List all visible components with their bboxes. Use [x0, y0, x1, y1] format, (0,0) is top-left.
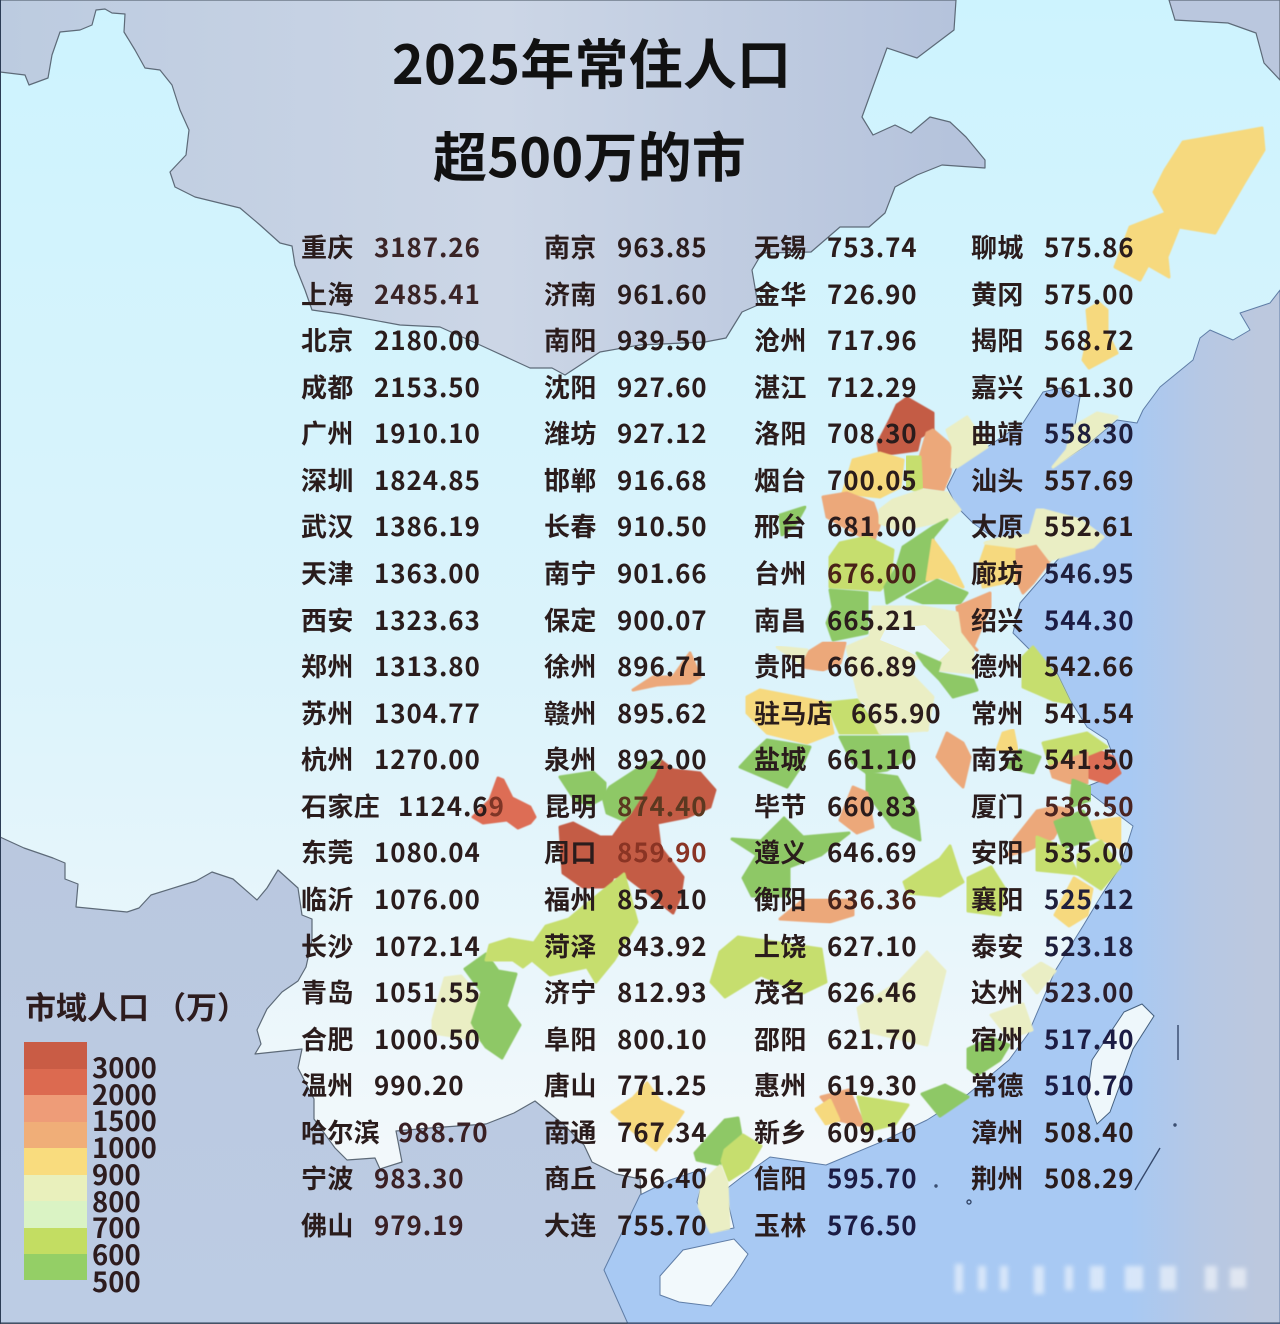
region: Huizhou	[858, 1097, 908, 1131]
list column 2: 961.60	[617, 275, 708, 312]
region: Hangzhou	[1009, 807, 1070, 855]
region: Ningbo neighbour	[1055, 811, 1097, 848]
list column 1: 东莞	[301, 833, 354, 870]
region: small green	[780, 507, 805, 535]
list column 3: 676.00	[827, 554, 918, 591]
list column 1: 983.30	[374, 1159, 465, 1196]
list column 2: 周口	[544, 833, 597, 870]
map: Russian far east	[1169, 0, 1280, 80]
list column 1: 1076.00	[374, 880, 481, 917]
list column 3: 660.83	[827, 787, 918, 824]
list column 4: 襄阳	[971, 880, 1024, 917]
list column 2: 910.50	[617, 507, 708, 544]
region: Chengdu	[473, 778, 535, 828]
list column 1: 1124.6	[398, 787, 489, 824]
list column 3: 681.00	[827, 507, 918, 544]
list column 3: 无锡	[754, 228, 807, 265]
list column 4: 常州	[971, 694, 1024, 731]
list column 3: 遵义	[754, 833, 807, 870]
list column 1: 1270.00	[374, 740, 481, 777]
list column 3: 726.90	[827, 275, 918, 312]
list column 4: 542.66	[1044, 647, 1135, 684]
legend scale labels	[92, 1046, 157, 1300]
list column 1: 2180.00	[374, 321, 481, 358]
list column 3: 毕节	[754, 787, 807, 824]
list column 1: 2153.50	[374, 368, 481, 405]
region: Yunnan green	[465, 954, 520, 1058]
list column 2: 阜阳	[544, 1020, 597, 1057]
list column 2: 939.50	[617, 321, 708, 358]
map: city regions shaded by population	[433, 128, 1264, 1232]
legend scale labels: 800	[92, 1180, 141, 1220]
list column 1: 1363.00	[374, 554, 481, 591]
list column 1: 成都	[301, 368, 354, 405]
region: Henan plain	[847, 607, 973, 730]
region: Hubei north	[840, 737, 910, 773]
list column 2: 859.90	[617, 833, 708, 870]
region: Quanzhou	[991, 1004, 1032, 1038]
list column 1: 上海	[301, 275, 354, 312]
list column 1: 宁波	[301, 1159, 354, 1196]
list column 4: 嘉兴	[971, 368, 1024, 405]
region: southern Shanxi	[830, 537, 893, 590]
region: Shandong north	[985, 510, 1103, 560]
map: seas	[604, 290, 1280, 1324]
list column 1: 990.20	[374, 1066, 465, 1103]
region: Nanning	[612, 1083, 683, 1150]
region: Zhoukou lake hole	[880, 625, 950, 665]
legend scale labels: 3000	[92, 1046, 157, 1086]
list column 4: 廊坊	[971, 554, 1024, 591]
list column 3: 708.30	[827, 414, 918, 451]
list column 2: 昆明	[544, 787, 597, 824]
legend scale labels: 600	[92, 1233, 141, 1273]
list column 4: 揭阳	[971, 321, 1024, 358]
list column 1: 佛山	[301, 1206, 354, 1243]
list column 4: 508.40	[1044, 1113, 1135, 1150]
region: Ningbo	[1092, 818, 1120, 848]
list column 2: 赣州	[544, 694, 597, 731]
region: Shijiazhuang	[823, 493, 880, 543]
region: Wenzhou	[1055, 878, 1092, 926]
region: Linyi	[957, 593, 990, 650]
legend colour ramp	[24, 1042, 87, 1280]
list column 3	[754, 228, 942, 1243]
list column 3: 台州	[754, 554, 807, 591]
region: Henan south	[827, 700, 880, 733]
list column 3: 驻马店	[754, 694, 833, 731]
list column 1	[301, 228, 505, 1243]
legend scale labels: 700	[92, 1206, 141, 1246]
region: Jinhua	[1037, 837, 1078, 874]
list column 3: 信阳	[754, 1159, 807, 1196]
list column 2: 邯郸	[544, 461, 597, 498]
list column 4: 聊城	[971, 228, 1024, 265]
region: Tangshan	[947, 417, 987, 467]
list column 1: 武汉	[301, 507, 354, 544]
list column 4: 黄冈	[971, 275, 1024, 312]
list column 4: 泰安	[971, 927, 1024, 964]
list column 1: 2485.41	[374, 275, 481, 312]
list column 4: 541.54	[1044, 694, 1135, 731]
list column 1: 杭州	[301, 740, 354, 777]
region: Dalian	[1053, 413, 1117, 467]
title: 2025年常住人口	[392, 21, 791, 100]
legend title: 市域人口（万）	[25, 983, 248, 1028]
list column 4: 546.95	[1044, 554, 1135, 591]
list column 4: 宿州	[971, 1020, 1024, 1057]
list column 3: 湛江	[754, 368, 807, 405]
list column 3: 700.05	[827, 461, 918, 498]
list column 3: 茂名	[754, 973, 807, 1010]
region: Changchun	[1083, 303, 1117, 368]
region: Xuzhou east	[917, 653, 977, 697]
region: Beijing	[878, 398, 933, 455]
title: 超500万的市	[433, 114, 746, 193]
list column 1: 青岛	[301, 973, 354, 1010]
list column 2: 济宁	[544, 973, 597, 1010]
list column 1: 天津	[301, 554, 354, 591]
region: Henan west	[827, 590, 867, 640]
list column 1: 苏州	[301, 694, 354, 731]
list column 2: 徐州	[544, 647, 597, 684]
list column 3: 753.74	[827, 228, 918, 265]
list column 4: 541.50	[1044, 740, 1135, 777]
region: Guizhou lime	[486, 874, 637, 982]
region: Shantou	[922, 1085, 968, 1116]
region: Shangrao	[968, 867, 1005, 915]
list column 1: 长沙	[301, 927, 354, 964]
list column 1: 988.70	[398, 1113, 489, 1150]
list column 3: 金华	[754, 275, 807, 312]
region: Maoming	[722, 1135, 761, 1180]
list column 1: 临沂	[301, 880, 354, 917]
list column 1: 广州	[301, 414, 354, 451]
list column 1: 北京	[301, 321, 354, 358]
list column 3: 665.90	[851, 694, 942, 731]
list column 3: 717.96	[827, 321, 918, 358]
list column 3: 661.10	[827, 740, 918, 777]
list column 4: 536.50	[1044, 787, 1135, 824]
list column 2: 892.00	[617, 740, 708, 777]
region: Shanghai	[1087, 747, 1120, 783]
list column 4: 曲靖	[971, 414, 1024, 451]
region: Zhanjiang	[699, 1166, 729, 1232]
region: Anhui east	[1007, 750, 1040, 773]
list column 1: 1386.19	[374, 507, 481, 544]
list column 2: 商丘	[544, 1159, 597, 1196]
list column 4	[971, 228, 1135, 1196]
list column 2: 南通	[544, 1113, 597, 1150]
list column 4: 575.86	[1044, 228, 1135, 265]
list column 3: 贵阳	[754, 647, 807, 684]
list column 4: 552.61	[1044, 507, 1135, 544]
list column 4: 523.00	[1044, 973, 1135, 1010]
list column 2: 南宁	[544, 554, 597, 591]
legend scale labels: 900	[92, 1153, 141, 1193]
list column 1: 1313.80	[374, 647, 481, 684]
list column 1: 石家庄	[301, 787, 380, 824]
list column 1: 1072.14	[374, 927, 481, 964]
legend scale labels: 1500	[92, 1099, 157, 1139]
list column 3: 上饶	[754, 927, 807, 964]
list column 4: 德州	[971, 647, 1024, 684]
region: Sichuan green west	[560, 772, 605, 805]
region: Anhui	[937, 733, 970, 787]
list column 4: 绍兴	[971, 601, 1024, 638]
region: Huzhou	[1070, 780, 1090, 807]
list column 3: 沧州	[754, 321, 807, 358]
list column 1: 1304.77	[374, 694, 481, 731]
region: Heze	[927, 540, 963, 587]
list column 1: 1824.85	[374, 461, 481, 498]
region: Shandong centre	[980, 543, 1017, 587]
region: Tianjin	[920, 430, 953, 490]
region: Chongqing	[560, 760, 715, 913]
list column 3: 南昌	[754, 601, 807, 638]
list column 4: 557.69	[1044, 461, 1135, 498]
list column 4: 525.12	[1044, 880, 1135, 917]
region: Hangzhou north	[1050, 753, 1087, 783]
region: pale south	[857, 687, 927, 733]
list column 3: 新乡	[754, 1113, 807, 1150]
list column 4: 535.00	[1044, 833, 1135, 870]
list column 4: 544.30	[1044, 601, 1135, 638]
region: Xianyang strip	[633, 653, 700, 690]
list column 3: 712.29	[827, 368, 918, 405]
list column 2: 756.40	[617, 1159, 708, 1196]
list column 3: 595.70	[827, 1159, 918, 1196]
region: Xingtai border	[907, 457, 922, 493]
list column 3: 609.10	[827, 1113, 918, 1150]
list column 3: 惠州	[754, 1066, 807, 1103]
list column 4: 523.18	[1044, 927, 1135, 964]
list column 2: 泉州	[544, 740, 597, 777]
region: Weifang	[1017, 543, 1050, 593]
list column 3: 621.70	[827, 1020, 918, 1057]
list column 1: 3187.26	[374, 228, 481, 265]
legend scale labels: 2000	[92, 1073, 157, 1113]
list column 1: 1051.55	[374, 973, 481, 1010]
list column 3: 626.46	[827, 973, 918, 1010]
list column 2: 927.12	[617, 414, 708, 451]
list column 1: 重庆	[301, 228, 354, 265]
region: Cangzhou	[880, 490, 960, 530]
list column 3: 619.30	[827, 1066, 918, 1103]
region: Foshan	[816, 1100, 839, 1124]
region: Nanchang	[904, 846, 963, 896]
map: southwestern neighbours	[0, 837, 650, 1324]
list column 2: 800.10	[617, 1020, 708, 1057]
list column 4: 漳州	[971, 1113, 1024, 1150]
map: northern neighbours	[0, 0, 985, 375]
list column 2: 927.60	[617, 368, 708, 405]
region: Suzhou	[1043, 733, 1107, 765]
list column 2: 916.68	[617, 461, 708, 498]
list column 2: 963.85	[617, 228, 708, 265]
list column 4: 568.72	[1044, 321, 1135, 358]
legend scale labels: 1000	[92, 1126, 157, 1166]
list column 2: 济南	[544, 275, 597, 312]
map: Hainan island	[660, 1239, 748, 1306]
list column 4: 汕头	[971, 461, 1024, 498]
list column 2: 755.70	[617, 1206, 708, 1243]
region: small yellow	[997, 730, 1017, 750]
list column 4: 荆州	[971, 1159, 1024, 1196]
list column 3: 627.10	[827, 927, 918, 964]
list column 1: 1000.50	[374, 1020, 481, 1057]
list column 2	[544, 228, 708, 1243]
list column 1: 1323.63	[374, 601, 481, 638]
list column 3: 玉林	[754, 1206, 807, 1243]
list column 2: 895.62	[617, 694, 708, 731]
list column 2: 南阳	[544, 321, 597, 358]
list column 3: 衡阳	[754, 880, 807, 917]
legend	[24, 983, 248, 1300]
region: Wuhan	[840, 787, 873, 833]
list column 2: 长春	[544, 507, 597, 544]
list column 4: 太原	[971, 507, 1024, 544]
list column 2: 唐山	[544, 1066, 597, 1103]
list column 4: 517.40	[1044, 1020, 1135, 1057]
list column 3: 636.36	[827, 880, 918, 917]
region: Zhangzhou	[968, 1038, 1009, 1075]
list column 3: 盐城	[754, 740, 807, 777]
list column 1: 温州	[301, 1066, 354, 1103]
list column 2: 812.93	[617, 973, 708, 1010]
list column 1: 1080.04	[374, 833, 481, 870]
list column 3: 烟台	[754, 461, 807, 498]
list column 3: 邢台	[754, 507, 807, 544]
list column 2: 沈阳	[544, 368, 597, 405]
list column 4: 508.29	[1044, 1159, 1135, 1196]
list column 2: 767.34	[617, 1113, 708, 1150]
region: Shaoyang	[711, 937, 826, 997]
list column 1: 西安	[301, 601, 354, 638]
region: Fuzhou	[1023, 963, 1055, 993]
list column 1: 合肥	[301, 1020, 354, 1057]
list column 2: 896.71	[617, 647, 708, 684]
list column 2: 843.92	[617, 927, 708, 964]
list column 2: 874.40	[617, 787, 708, 824]
region: Hengyang strip	[780, 900, 853, 922]
region: Harbin	[1115, 128, 1264, 280]
map: small islands and boundary dashes	[935, 1025, 1178, 1204]
map: Taiwan island	[1087, 1004, 1154, 1124]
list column 3: 洛阳	[754, 414, 807, 451]
list column 4: 厦门	[971, 787, 1024, 824]
region: Handan strip	[885, 520, 947, 603]
list column 2: 菏泽	[544, 927, 597, 964]
region: Ganzhou	[858, 952, 945, 1045]
list column 2: 771.25	[617, 1066, 708, 1103]
list column 3: 646.69	[827, 833, 918, 870]
list column 1: 1910.10	[374, 414, 481, 451]
list column 2: 福州	[544, 880, 597, 917]
list column 1: 979.19	[374, 1206, 465, 1243]
region: Taizhou	[1078, 841, 1120, 889]
list column 3: 576.50	[827, 1206, 918, 1243]
list column 1: 哈尔滨	[301, 1113, 380, 1150]
list column 2: 南京	[544, 228, 597, 265]
region: Guiyang area	[803, 643, 845, 670]
list column 4: 561.30	[1044, 368, 1135, 405]
region: Baoding	[843, 453, 903, 497]
list column 2: 大连	[544, 1206, 597, 1243]
list column 2: 保定	[544, 601, 597, 638]
list column 4: 575.00	[1044, 275, 1135, 312]
region: Zunyi	[732, 818, 849, 896]
list column 4: 达州	[971, 973, 1024, 1010]
list column 1: 深圳	[301, 461, 354, 498]
list column 2: 852.10	[617, 880, 708, 917]
region: pale west	[777, 647, 807, 663]
region: Yulin	[695, 1118, 741, 1165]
list column 4: 安阳	[971, 833, 1024, 870]
region: Hubei east	[867, 773, 920, 840]
watermark: blurred white streaks	[955, 1264, 1246, 1294]
list column 2: 901.66	[617, 554, 708, 591]
list column 1: 9	[489, 787, 505, 824]
region: Jining	[907, 580, 967, 603]
region: Zhumadian	[747, 690, 833, 743]
list column 4: 510.70	[1044, 1066, 1135, 1103]
region: Guangzhou	[821, 1090, 867, 1127]
legend scale labels: 500	[92, 1260, 141, 1300]
list column 2: 潍坊	[544, 414, 597, 451]
region: Sichuan green east	[603, 760, 660, 820]
title	[392, 21, 791, 193]
region: Yancheng label area	[740, 740, 810, 787]
list column 1: 郑州	[301, 647, 354, 684]
list column 4: 南充	[971, 740, 1024, 777]
list column 4: 558.30	[1044, 414, 1135, 451]
list column 2: 900.07	[617, 601, 708, 638]
list column 3: 邵阳	[754, 1020, 807, 1057]
list column 3: 665.21	[827, 601, 918, 638]
list column 3: 666.89	[827, 647, 918, 684]
list column 4: 常德	[971, 1066, 1024, 1103]
region: Yancheng coast	[1023, 647, 1070, 703]
region: Qujing	[433, 976, 478, 1040]
